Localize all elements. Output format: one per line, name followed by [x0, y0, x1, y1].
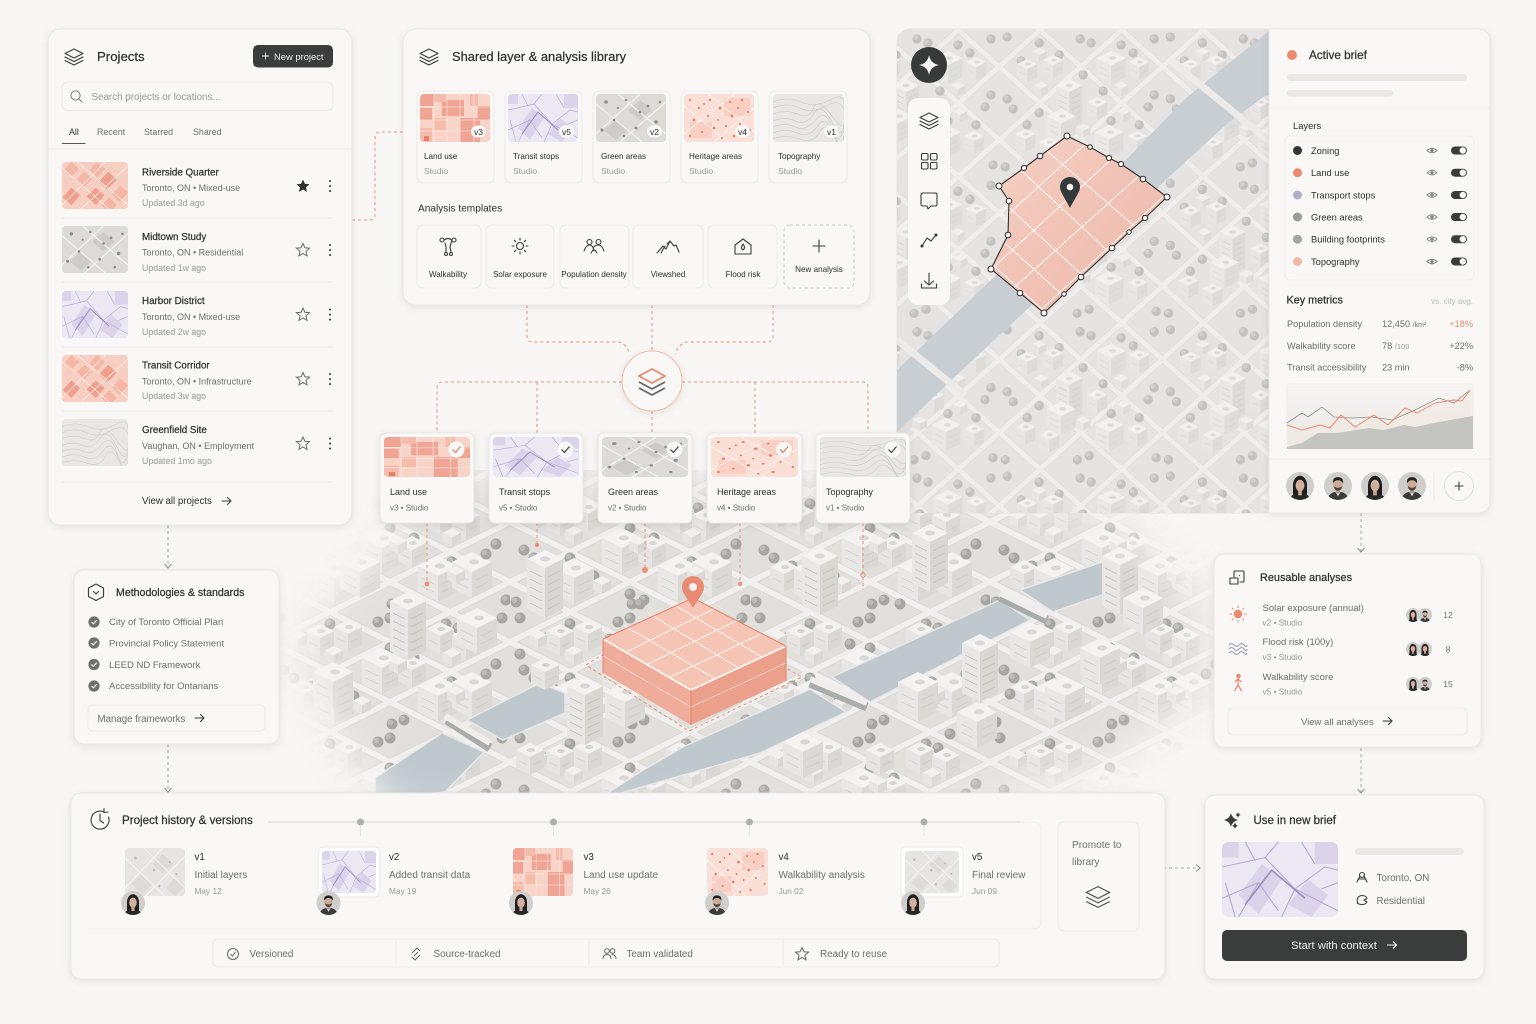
metrics trend chart — [1287, 384, 1473, 449]
icon: library layers — [420, 49, 438, 65]
icon: history clock — [91, 808, 109, 829]
search field: Search projects or locations... — [92, 92, 221, 103]
template: new analysis: New analysis — [795, 265, 843, 274]
parcel location pin — [682, 576, 704, 608]
button: new project: New project — [274, 51, 324, 62]
icon: sparkles — [1224, 812, 1240, 829]
tool: grid — [922, 154, 937, 169]
brief details: Toronto, ON — [1376, 873, 1429, 884]
template: new analysis — [784, 225, 854, 288]
status: source-tracked — [412, 948, 500, 960]
layer: zoning — [1293, 146, 1467, 156]
version v2: May 19 — [389, 886, 417, 896]
version timeline — [268, 818, 1025, 836]
button: manage frameworks: Manage frameworks — [98, 714, 185, 725]
layer: building footprints — [1293, 235, 1467, 245]
key metrics: 78 /100 — [1382, 341, 1409, 351]
layer card: green areas: Green areas — [608, 487, 659, 497]
layer card: heritage areas: Heritage areas — [717, 487, 777, 497]
layer card: heritage areas — [707, 433, 802, 523]
template: population density: Population density — [561, 270, 627, 279]
tool: download — [922, 273, 936, 288]
project row: Transit Corridor: Toronto, ON • Infrastructure — [142, 376, 252, 386]
layer: land use: Land use — [1311, 168, 1349, 178]
version v4 — [705, 848, 865, 916]
highlighted isometric parcel volume — [603, 598, 786, 725]
tabs: All — [69, 127, 79, 137]
version v1 — [121, 848, 247, 916]
layer card: green areas — [598, 433, 692, 523]
version v5: Jun 09 — [972, 886, 997, 896]
project row: Midtown Study — [62, 226, 330, 273]
connector: projects to library — [352, 132, 403, 220]
layer: topography — [1293, 257, 1467, 267]
status: ready to reuse — [796, 948, 887, 960]
key metrics: Key metrics — [1286, 294, 1343, 306]
connector: library to hub — [527, 305, 773, 354]
layer tile: transit stops — [505, 91, 582, 183]
gray arrow: reusable analyses to brief — [1358, 748, 1364, 793]
standard: LEED ND: LEED ND Framework — [109, 660, 201, 671]
version v5: v5 — [972, 852, 983, 863]
button: start with context: Start with context — [1291, 940, 1378, 952]
key metrics: -8% — [1457, 362, 1473, 372]
layer tile: green areas: Studio — [601, 166, 625, 176]
version v1: May 12 — [194, 886, 222, 896]
project row: Midtown Study: Toronto, ON • Residential — [142, 248, 243, 258]
map base — [897, 29, 1277, 513]
status: team validated: Team validated — [626, 949, 693, 960]
analysis row: solar exposure — [1230, 603, 1453, 628]
project row: Transit Corridor — [62, 355, 330, 406]
active brief title — [1287, 49, 1467, 96]
layer tile: green areas — [593, 91, 670, 183]
project row: Harbor District — [62, 291, 330, 338]
analysis row: solar exposure: v2 • Studio — [1262, 618, 1303, 628]
gray arrow: projects to methodologies — [164, 525, 172, 568]
analysis row: flood risk — [1229, 637, 1451, 662]
brief details — [1355, 848, 1464, 907]
layer: land use — [1293, 168, 1467, 178]
layer tile: land use: Land use — [424, 152, 458, 161]
selected parcel on map — [988, 132, 1170, 316]
heading: library: Shared layer & analysis library — [452, 49, 627, 64]
heading: history: Project history & versions — [122, 814, 253, 827]
layer tile: heritage areas — [681, 91, 758, 183]
button: manage frameworks — [88, 705, 265, 731]
map river — [897, 22, 1280, 432]
layer tile: green areas: v2 — [650, 127, 659, 137]
standard: accessibility: Accessibility for Ontarians — [109, 681, 219, 692]
city towers — [313, 524, 1163, 778]
version v5 — [901, 847, 1026, 916]
key metrics: +18% — [1449, 319, 1473, 329]
status: versioned — [228, 948, 293, 960]
status: source-tracked: Source-tracked — [434, 949, 500, 960]
version v2: Added transit data — [389, 870, 471, 881]
layer: green areas — [1293, 212, 1467, 222]
analysis row: walkability score: 15 — [1443, 679, 1453, 689]
layer tile: land use: Studio — [424, 166, 448, 176]
tool: comment — [921, 193, 937, 209]
brief preview map — [1222, 842, 1338, 917]
version v2 — [316, 847, 471, 916]
analysis row: solar exposure: 12 — [1443, 610, 1453, 620]
connector: hub to layer cards — [437, 382, 868, 433]
tool: trend — [921, 234, 937, 247]
project row: Transit Corridor: Transit Corridor — [142, 360, 210, 372]
map pin — [1060, 177, 1080, 208]
layer tile: transit stops: Transit stops — [513, 152, 559, 161]
layer: transport stops — [1293, 190, 1467, 200]
gray arrow: methodologies to history — [164, 744, 172, 792]
key metrics: Walkability score — [1287, 341, 1356, 351]
button: view all analyses: View all analyses — [1301, 717, 1374, 728]
tabs: Recent — [97, 127, 126, 137]
panel: use in new brief — [1205, 795, 1484, 979]
layer: transport stops: Transport stops — [1311, 190, 1376, 200]
icon: shield — [88, 584, 104, 600]
layer tile: land use: v3 — [474, 127, 483, 137]
layer tile: transit stops: Studio — [513, 166, 537, 176]
project row: Transit Corridor: Updated 3w ago — [142, 391, 206, 401]
version v5: Final review — [972, 870, 1026, 881]
layer tile: heritage areas: Heritage areas — [689, 152, 742, 161]
tool: layers — [920, 113, 938, 129]
layer tile: topography: Topography — [778, 152, 821, 161]
layer tile: transit stops: v5 — [562, 127, 571, 137]
project row: Greenfield Site: Vaughan, ON • Employment — [142, 441, 255, 451]
status: versioned: Versioned — [250, 949, 293, 960]
river bridges — [447, 597, 1047, 748]
panel: active brief — [1269, 29, 1490, 513]
project row: Harbor District: Harbor District — [142, 296, 205, 307]
icon: projects layers — [65, 49, 83, 65]
project row: Greenfield Site — [62, 419, 330, 474]
panel: shared layer and analysis library — [403, 29, 870, 305]
layer card: land use: Land use — [390, 487, 427, 497]
version v3: May 26 — [584, 886, 611, 896]
layer: building footprints: Building footprints — [1311, 235, 1385, 245]
layer tile: land use — [417, 91, 494, 183]
gray arrow: promote to brief — [1151, 864, 1200, 872]
icon: reusable — [1230, 571, 1244, 584]
template: flood risk — [708, 225, 777, 288]
key metrics — [1286, 294, 1473, 372]
layer card: topography — [816, 433, 910, 523]
standard: provincial policy: Provincial Policy Statement — [109, 638, 224, 650]
heading: reusable analyses: Reusable analyses — [1260, 572, 1353, 584]
analysis row: solar exposure: Solar exposure (annual) — [1262, 603, 1364, 614]
promote to library: library — [1072, 857, 1100, 868]
version v4: Jun 02 — [778, 886, 804, 896]
version v1: Initial layers — [194, 870, 247, 881]
layer: topography: Topography — [1311, 257, 1360, 267]
template: viewshed — [633, 225, 703, 288]
project row: Greenfield Site: Greenfield Site — [142, 425, 207, 436]
layer card: land use — [380, 433, 474, 523]
isometric city base map — [282, 470, 1214, 792]
button: view all analyses — [1228, 708, 1467, 735]
version v1: v1 — [194, 852, 205, 863]
layer card: green areas: v2 • Studio — [608, 504, 647, 512]
layer card: topography: v1 • Studio — [826, 504, 865, 512]
river — [375, 561, 1105, 800]
analysis row: walkability score: Walkability score — [1262, 672, 1333, 683]
layers list: Layers — [1293, 120, 1321, 131]
template: solar exposure — [486, 225, 554, 288]
layer: zoning: Zoning — [1311, 146, 1339, 156]
search field — [62, 82, 333, 110]
layer card: land use: v3 • Studio — [390, 504, 429, 512]
status: ready to reuse: Ready to reuse — [820, 949, 887, 960]
template: flood risk: Flood risk — [726, 270, 761, 279]
layers list — [1285, 120, 1474, 280]
template: solar exposure: Solar exposure — [493, 270, 547, 279]
link: view all projects: View all projects — [142, 496, 212, 507]
project row: Riverside Quarter — [62, 162, 330, 213]
button: start with context — [1222, 930, 1467, 961]
key metrics: vs. city avg. — [1431, 297, 1473, 306]
layer tile: topography: Studio — [778, 166, 802, 176]
heading: use in new brief: Use in new brief — [1254, 815, 1337, 827]
layer tile: topography — [769, 91, 847, 183]
layer card: transit stops — [489, 433, 583, 523]
panel: projects — [48, 29, 352, 525]
version v4: v4 — [778, 852, 789, 863]
map bridges — [897, 60, 1280, 395]
standard: official plan: City of Toronto Official Plan — [109, 617, 223, 628]
brief details: Residential — [1376, 896, 1425, 907]
layer card: topography: Topography — [826, 487, 874, 497]
panel: methodologies and standards — [74, 570, 279, 744]
layer tile: heritage areas: Studio — [689, 166, 713, 176]
heading: methodologies: Methodologies & standards — [116, 587, 244, 599]
project row: Riverside Quarter: Toronto, ON • Mixed-use — [142, 183, 240, 193]
layer: green areas: Green areas — [1311, 212, 1363, 222]
analysis row: walkability score — [1234, 672, 1453, 696]
template: walkability — [417, 225, 481, 288]
analysis row: walkability score: v5 • Studio — [1262, 686, 1303, 696]
layer tile: green areas: Green areas — [601, 152, 646, 161]
version v3: Land use update — [584, 870, 658, 881]
version v4: Walkability analysis — [778, 870, 865, 881]
promote to library: Promote to — [1072, 840, 1122, 851]
layer tile: topography: v1 — [827, 127, 836, 137]
version v2: v2 — [389, 852, 399, 863]
layer card: transit stops: Transit stops — [499, 487, 551, 497]
gray arrow: map to reusable analyses — [1358, 513, 1364, 552]
template: walkability: Walkability — [429, 270, 467, 279]
heading: analysis templates: Analysis templates — [418, 204, 502, 214]
project row: Riverside Quarter: Updated 3d ago — [142, 198, 205, 208]
project row: Greenfield Site: Updated 1mo ago — [142, 456, 212, 466]
status bar — [213, 939, 999, 967]
active brief title: Active brief — [1309, 49, 1368, 62]
project row: Midtown Study: Updated 1w ago — [142, 263, 206, 273]
key metrics: 23 min — [1382, 362, 1410, 372]
tabs: Shared — [193, 127, 222, 137]
key metrics: 12,450 /km² — [1382, 319, 1427, 329]
layer hub — [622, 351, 682, 411]
project row: Riverside Quarter: Riverside Quarter — [142, 168, 220, 178]
project row: Harbor District: Toronto, ON • Mixed-use — [142, 312, 240, 322]
add member button — [1444, 472, 1474, 500]
team avatars — [1286, 472, 1434, 501]
analysis row: flood risk: 8 — [1446, 644, 1451, 654]
version v3 — [509, 848, 658, 916]
button: new project — [253, 45, 333, 68]
panel: project history and versions — [71, 793, 1165, 979]
tabs: Starred — [144, 127, 173, 137]
analysis row: flood risk: v3 • Studio — [1262, 652, 1303, 662]
promote to library — [1058, 822, 1139, 931]
analysis row: flood risk: Flood risk (100y) — [1262, 637, 1333, 648]
key metrics: Transit accessibility — [1287, 362, 1367, 372]
key metrics: +22% — [1449, 341, 1473, 351]
project row: Midtown Study: Midtown Study — [142, 232, 206, 243]
template: population density — [560, 225, 629, 288]
layer tile: heritage areas: v4 — [738, 127, 747, 137]
key metrics: Population density — [1287, 319, 1362, 329]
template: viewshed: Viewshed — [651, 270, 685, 279]
map logo badge — [911, 47, 947, 83]
layer card: heritage areas: v4 • Studio — [717, 504, 756, 512]
layer card: transit stops: v5 • Studio — [499, 504, 538, 512]
parcel footprint dashed outline — [586, 654, 802, 731]
project row: Harbor District: Updated 2w ago — [142, 327, 206, 337]
heading: projects: Projects — [97, 49, 145, 64]
tabs — [62, 127, 222, 144]
connector: layer cards to city — [425, 523, 865, 590]
panel: reusable analyses — [1214, 554, 1481, 747]
panel: map view — [897, 22, 1280, 513]
version v3: v3 — [584, 852, 594, 863]
map toolbar — [908, 98, 950, 305]
